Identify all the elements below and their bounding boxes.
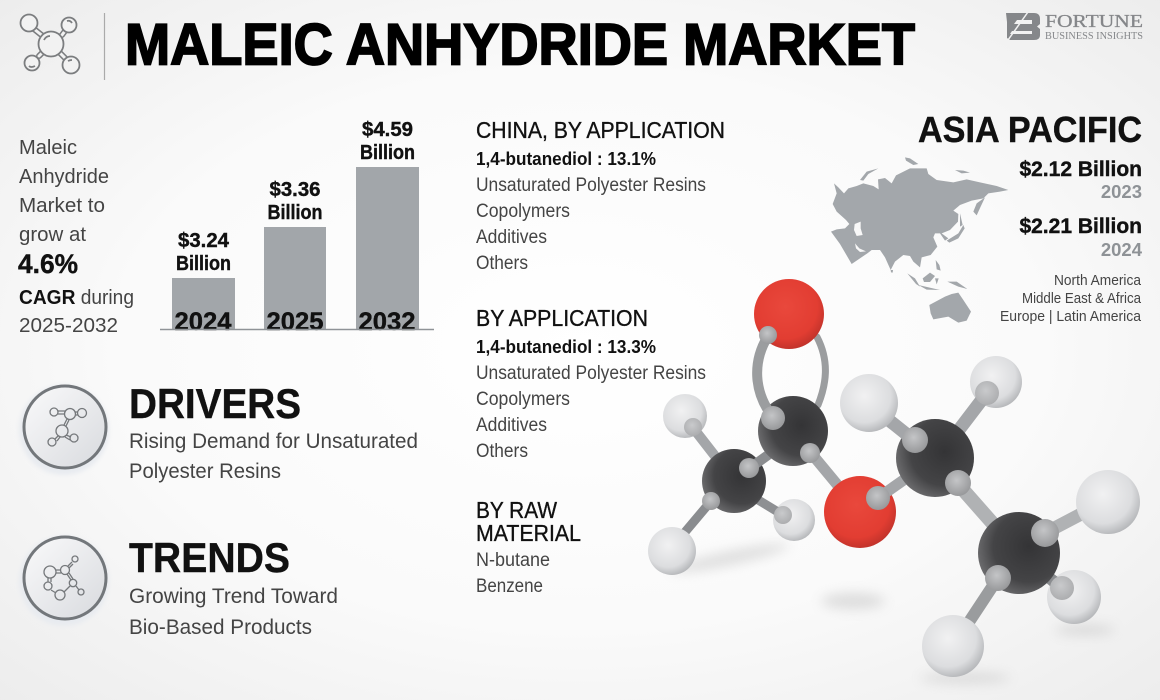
illustration: 3D molecule <box>648 279 1140 683</box>
heading: trends: TRENDS <box>129 534 290 581</box>
bar 2032 <box>356 119 419 336</box>
stat: 2023 value <box>1019 158 1142 202</box>
heading: drivers: DRIVERS <box>129 380 301 427</box>
carbonyl group <box>754 279 845 494</box>
list: other regions <box>1000 273 1142 325</box>
bar 2025: 2025 <box>266 308 324 336</box>
text: CAGR summary: grow at <box>19 223 86 246</box>
segment: China by application: Others <box>476 253 528 274</box>
text: drivers detail <box>129 430 418 483</box>
segment: by raw material: MATERIAL <box>476 520 581 546</box>
text: trends detail: Growing Trend Toward <box>129 585 338 608</box>
segment: by raw material: Benzene <box>476 576 543 597</box>
text: CAGR summary: 2025-2032 <box>19 314 118 337</box>
left methyl group <box>648 394 815 575</box>
logo: Fortune Business Insights: FORTUNE <box>1045 11 1143 31</box>
text: trends detail: Bio-Based Products <box>129 616 312 639</box>
segment: by application: Additives <box>476 415 547 436</box>
segment: China by application: Copolymers <box>476 201 570 222</box>
segment: China by application: Additives <box>476 227 547 248</box>
bar 2024: $3.24 <box>178 230 230 252</box>
segment: China by application: CHINA, BY APPLICATION <box>476 117 725 143</box>
segment: by application: Copolymers <box>476 389 570 410</box>
segment: China by application <box>476 117 725 274</box>
segment: by application: Unsaturated Polyester Resins <box>476 363 706 384</box>
stat: 2024 value: $2.21 Billion <box>1019 215 1142 238</box>
segment: by raw material: BY RAW <box>476 497 557 523</box>
text: CAGR summary: 4.6% <box>18 249 78 279</box>
bar 2032: 2032 <box>358 308 416 336</box>
logo: Fortune Business Insights: BUSINESS INSIGHTS <box>1045 31 1143 42</box>
segment: China by application: Unsaturated Polyester Resins <box>476 175 706 196</box>
bar 2024: Billion <box>176 253 231 275</box>
stat: 2024 value: 2024 <box>1101 239 1143 260</box>
segment: by application: Others <box>476 441 528 462</box>
text: CAGR summary: CAGR during <box>19 286 134 309</box>
bar 2024 <box>172 230 235 336</box>
ethyl group <box>840 356 1140 677</box>
map: Asia Pacific <box>831 157 1008 323</box>
segment: by raw material <box>476 497 581 597</box>
stat: 2023 value: 2023 <box>1101 181 1142 202</box>
text: CAGR summary <box>18 136 134 337</box>
bar 2025 <box>264 179 326 336</box>
text: trends detail <box>129 585 338 639</box>
icon: molecule header <box>20 14 80 74</box>
list: other regions: Middle East & Africa <box>1022 291 1142 307</box>
molecule shadows <box>670 539 1115 683</box>
text: CAGR summary: Market to <box>19 194 105 217</box>
segment: China by application: 1,4-butanediol : 13.1% <box>476 149 656 169</box>
list: other regions: Europe | Latin America <box>1000 309 1142 325</box>
bar chart: market size <box>160 119 434 336</box>
text: CAGR summary: Anhydride <box>19 165 109 188</box>
segment: by raw material: N-butane <box>476 550 550 571</box>
logo: Fortune Business Insights <box>1006 11 1143 42</box>
bar 2032: $4.59 <box>362 119 413 141</box>
stat: 2023 value: $2.12 Billion <box>1019 158 1142 181</box>
heading: Asia Pacific: ASIA PACIFIC <box>918 109 1142 150</box>
bar 2024: 2024 <box>174 308 232 336</box>
icon: drivers badge <box>19 385 109 475</box>
list: other regions: North America <box>1054 273 1142 289</box>
bar 2025: $3.36 <box>270 179 320 201</box>
ester oxygen <box>824 472 915 548</box>
title: MALEIC ANHYDRIDE MARKET <box>125 12 915 78</box>
stat: 2024 value <box>1019 215 1143 260</box>
bar 2032: Billion <box>360 142 415 164</box>
text: drivers detail: Rising Demand for Unsaturated <box>129 430 418 453</box>
icon: trends badge <box>19 536 109 626</box>
segment: by application: 1,4-butanediol : 13.3% <box>476 337 656 357</box>
segment: by application: BY APPLICATION <box>476 305 648 331</box>
bar 2025: Billion <box>268 202 322 224</box>
text: CAGR summary: Maleic <box>19 136 77 159</box>
header divider <box>104 13 106 80</box>
text: drivers detail: Polyester Resins <box>129 460 281 483</box>
segment: by application <box>476 305 706 462</box>
